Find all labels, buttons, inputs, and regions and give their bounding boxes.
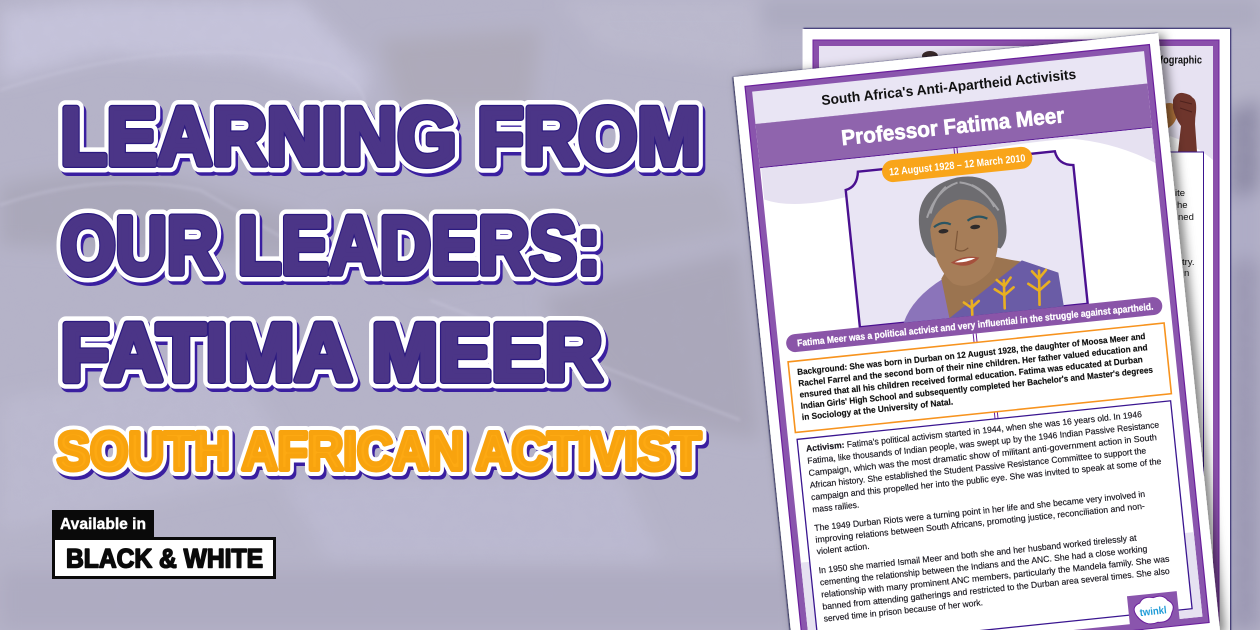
activism box: cementing the relationship between the Indians and the ANC. She had a close working	[819, 544, 1148, 587]
activism box: campaign and this propelled her into the public eye. She was invited to speak at some of the	[811, 456, 1162, 502]
name band: Professor Fatima Meer	[755, 83, 1152, 168]
title: Learning From: LEARNING FROM	[60, 92, 700, 182]
back poster inner page	[1168, 136, 1213, 562]
badge box: Black and White: BLACK & WHITE	[66, 544, 263, 574]
activism box: violent action.	[816, 541, 870, 556]
connector	[973, 332, 998, 420]
title: Fatima Meer: FATIMA MEER	[60, 308, 602, 398]
title: Learning From: LEARNING FROM	[60, 92, 700, 182]
background box: Rachel Farrel and the second born of their nine children. Her father valued education and	[798, 342, 1148, 388]
back poster text fragments: n	[1184, 268, 1189, 279]
back poster portrait fragment	[922, 51, 938, 58]
mouth	[951, 256, 980, 266]
subtitle: South African Activist: SOUTH AFRICAN ACTIVIST	[57, 422, 701, 482]
activism box: relationship with many prominent ANC members, particularly the Mandela family. She was	[821, 554, 1170, 600]
back poster text fragments: try.	[1182, 257, 1194, 268]
back poster text fragments: ned	[1178, 212, 1194, 223]
eyebrows	[933, 216, 988, 227]
sari pattern	[961, 270, 1052, 316]
nose	[954, 230, 969, 252]
subtitle: South African Activist: SOUTH AFRICAN ACTIVIST	[60, 425, 704, 485]
connector	[954, 147, 958, 156]
background box: in Sociology at the University of Natal.	[801, 397, 954, 422]
title: Our Leaders: OUR LEADERS:	[60, 200, 600, 292]
activism box: Fatima, like thousands of Indian people, was swept up by the 1946 Indian Passive Resistance	[807, 420, 1160, 466]
face	[930, 200, 998, 286]
activism box: African history. She established the Student Passive Resistance Committee to support the	[809, 445, 1147, 490]
subtitle: South African Activist: SOUTH AFRICAN ACTIVIST	[57, 422, 701, 482]
activism box: Campaign, which was the most dramatic show of militant anti-government action in South	[808, 432, 1157, 478]
title: Fatima Meer: FATIMA MEER	[60, 308, 602, 398]
header band: South Africa's Anti-Apartheid Activisits: South Africa's Anti-Apartheid Activisits	[821, 66, 1077, 108]
title: Our Leaders: OUR LEADERS:	[60, 200, 600, 292]
title: Fatima Meer: FATIMA MEER	[60, 308, 602, 398]
twinkl logo tab: twinkl	[1139, 604, 1167, 619]
front poster purple border	[745, 45, 1209, 630]
icon: raised fist, partly hidden	[1166, 103, 1176, 128]
back poster white text panel	[1170, 152, 1204, 476]
title: Learning From: LEARNING FROM	[60, 92, 700, 182]
back poster heading fragment: fographic	[1160, 54, 1202, 66]
header band: South Africa's Anti-Apartheid Activisits	[752, 51, 1147, 124]
activism box: banned from attending gatherings and restricted to the Durban area several times. She also	[822, 566, 1170, 612]
activism box: The 1949 Durban Riots were a turning point in her life and she became very involved in	[814, 489, 1146, 533]
back poster	[802, 29, 1230, 630]
hair	[918, 176, 1007, 258]
date pill: 12 August 1928 - 12 March 2010: 12 August 1928 – 12 March 2010	[889, 152, 1026, 178]
background box: Background: She was born in Durban on 12 August 1928, the daughter of Moosa Meer and	[797, 331, 1146, 377]
icon: raised fist	[1173, 93, 1197, 152]
background box: ensured that all his children received formal education. Fatima was educated at Durban	[799, 354, 1143, 400]
title: Learning From: LEARNING FROM	[63, 95, 703, 186]
background box	[788, 323, 1171, 433]
front poster paper	[734, 33, 1220, 630]
blouse	[904, 280, 950, 323]
twinkl logo tab	[1127, 591, 1180, 630]
back poster text fragments: ite	[1175, 188, 1185, 199]
back poster purple border	[813, 40, 1219, 630]
lavender swoosh	[761, 128, 1156, 208]
title: Our Leaders: OUR LEADERS:	[63, 204, 603, 295]
activism box: Activism: Fatima's political activism started in 1944, when she was 16 years old. In 1946	[806, 409, 1142, 454]
sari	[944, 257, 1064, 318]
activism box: In 1950 she married Ismail Meer and both she and her husband worked tirelessly at	[818, 532, 1138, 575]
activism box: improving relations between South Africans, promoting justice, reconciliation and non-	[815, 501, 1145, 545]
title: Our Leaders: OUR LEADERS:	[60, 200, 600, 292]
ribbon caption: Fatima Meer was a political activist and very influential in the struggle against apartheid.	[797, 302, 1154, 349]
back poster paper	[802, 29, 1230, 630]
name band: Professor Fatima Meer: Professor Fatima Meer	[840, 103, 1066, 150]
background box: Indian Girls' High School and subsequently completed her Bachelor's and Master's degrees	[800, 365, 1153, 411]
badge label: Available in	[52, 510, 154, 538]
activism box	[797, 401, 1192, 630]
badge label: Available in: Available in	[60, 516, 146, 533]
badge: Available in black and white	[52, 510, 274, 578]
neck	[941, 256, 1020, 318]
eyes	[938, 229, 948, 234]
activism box: mass rallies.	[812, 500, 860, 514]
hair strands	[924, 179, 999, 218]
front poster inner page	[755, 83, 1202, 630]
date pill: 12 August 1928 - 12 March 2010	[881, 146, 1033, 183]
bottom lavender trim	[801, 522, 1202, 630]
back poster lavender header	[819, 46, 1213, 160]
activism box: served time in prison because of her work.	[823, 597, 983, 624]
front poster	[734, 33, 1220, 630]
portrait: Fatima Meer	[904, 176, 1064, 323]
back poster text fragments: he	[1177, 200, 1188, 211]
portrait frame	[844, 150, 1088, 327]
back poster text fragments	[1175, 188, 1194, 279]
title: Fatima Meer: FATIMA MEER	[63, 311, 605, 402]
